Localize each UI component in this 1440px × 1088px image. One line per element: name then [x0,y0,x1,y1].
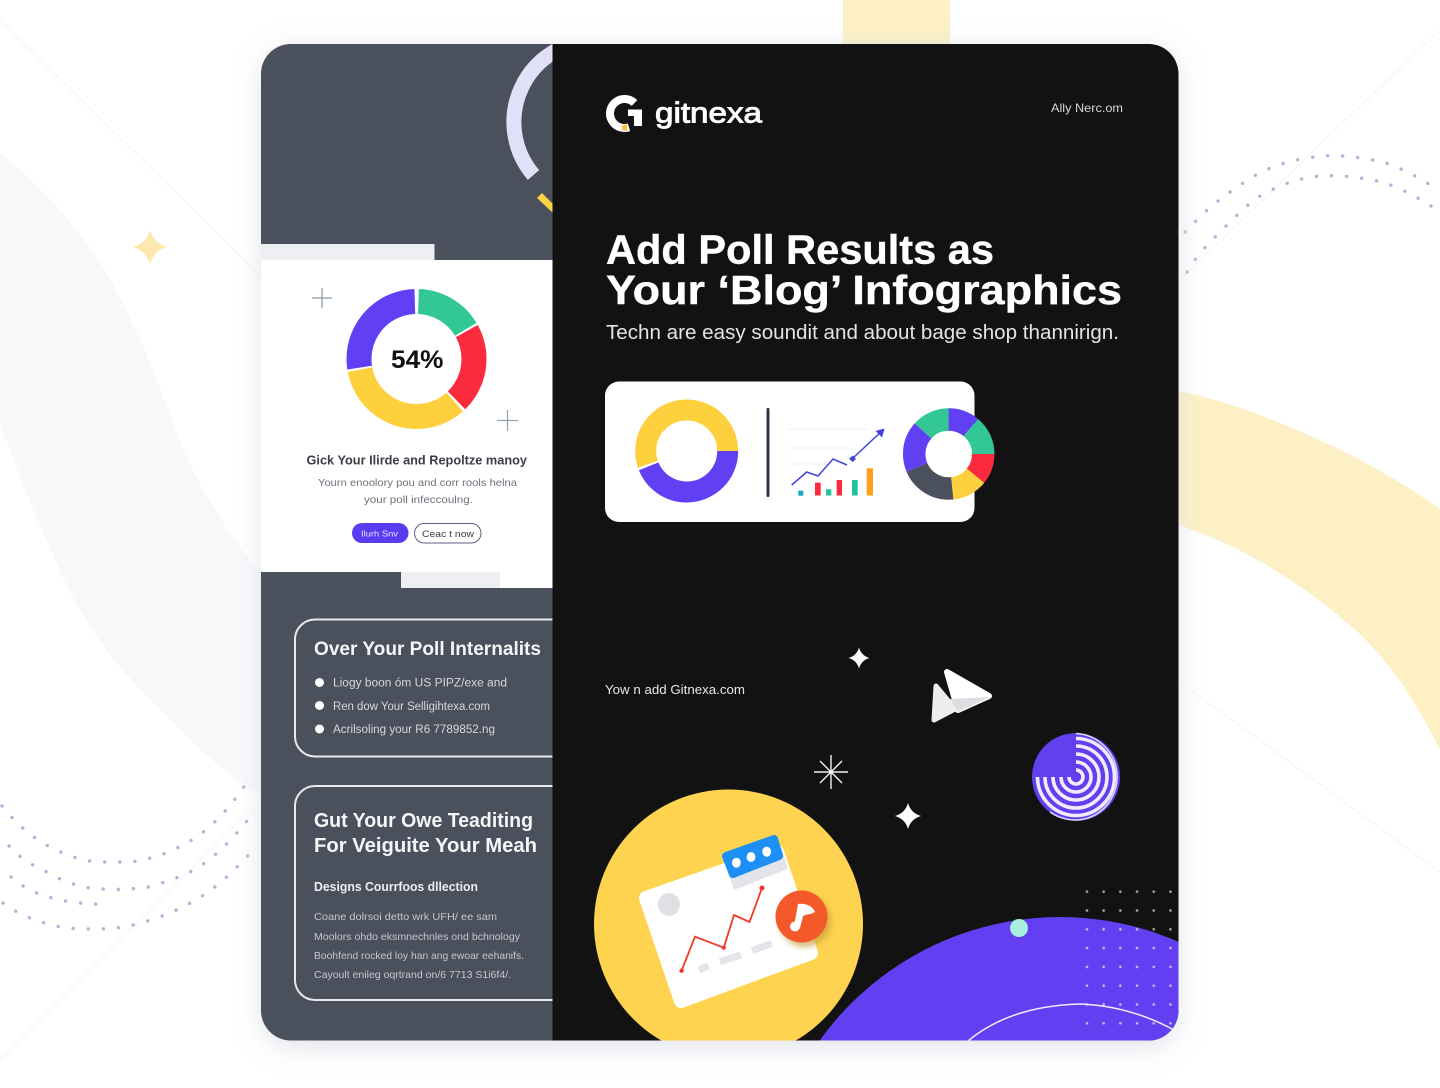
internals box [294,618,552,758]
white poll panel [261,260,552,588]
outline button [414,524,481,543]
main headline: Your ‘Blog’ Infographics [606,267,1122,313]
outline button: Ceac t now [422,529,474,540]
blue tag [726,839,779,874]
line and bar chart [788,428,884,496]
yellow and purple donut [646,410,728,492]
teaching subheading: Designs Courrfoos dllection [314,879,478,894]
top right link: Ally Nerc.om [1051,101,1123,115]
bullet list: Liogy boon óm US PIPZ/exe and [333,678,507,690]
left slate panel [261,44,552,1040]
teaching box [294,785,552,1001]
poll description: Yourn enoolory pou and corr rools helna [318,477,517,489]
card shadow [263,50,1177,1046]
sparkle star top [848,648,870,668]
white contour arc [968,1004,1174,1041]
sparkle star lower [895,803,921,829]
orange music badge [776,890,831,947]
teaching paragraph: Cayoult enileg oqrtrand on/6 7713 S1i6f4/. [314,969,511,981]
internals heading: Over Your Poll Internalits [314,639,541,660]
tilted analytics card [646,839,831,1001]
red trend line [679,886,764,973]
logo icon [610,99,642,131]
dot grid [1079,882,1179,1032]
plus mark right [497,410,518,431]
purple button: Ilurh Snv [361,528,399,538]
white chart card [605,382,983,522]
paper plane icon [934,672,990,720]
poll description: your poll infeccoulng. [364,494,473,506]
vertical divider [766,408,770,497]
asterisk sparkle [814,755,848,789]
top light strip [261,244,434,261]
purple hill [819,917,1180,1041]
donut value: 54% [391,346,444,374]
bullet list: Ren dow Your Selligihtexa.com [333,701,490,713]
poll heading: Gick Your Ilirde and Repoltze manoy [306,454,527,468]
purple button [352,523,408,543]
main headline: Add Poll Results as [606,226,994,272]
teaching paragraph: Coane dolrsoi detto wrk UFH/ ee sam [314,911,497,923]
infographic card [261,40,1180,1059]
yellow circle [594,790,863,1058]
teaching heading: Gut Your Owe Teaditing [314,810,533,832]
mint dot [1010,919,1028,937]
avatar dot [658,893,680,916]
right dark panel [552,44,1180,1058]
teaching paragraph [314,911,524,981]
donut chart 54% [359,302,474,416]
bullet list [315,678,507,736]
website line: Yow n add Gitnexa.com [605,682,745,697]
subheadline: Techn are easy soundit and about bage shop thannirign. [606,322,1119,344]
grey dashes [699,943,772,970]
teaching heading [314,810,537,857]
tag shadow [728,850,786,888]
teaching heading: For Veiguite Your Meah [314,835,537,857]
decorative lavender arc [506,44,552,180]
bullet list: Acrilsoling your R6 7789852.ng [333,724,495,736]
multicolour donut [914,420,983,488]
teaching paragraph: Boohfend rocked loy han ang ewoar eehanifs. [314,950,524,962]
radar disc icon [1032,733,1120,821]
plus mark left [312,288,332,308]
logo wordmark: gitnexa [655,98,762,130]
yellow accent tick [537,193,553,213]
main headline [606,226,1122,313]
poll description [318,477,517,506]
teaching paragraph: Moolors ohdo eksmnechnles ond bchnology [314,931,521,943]
